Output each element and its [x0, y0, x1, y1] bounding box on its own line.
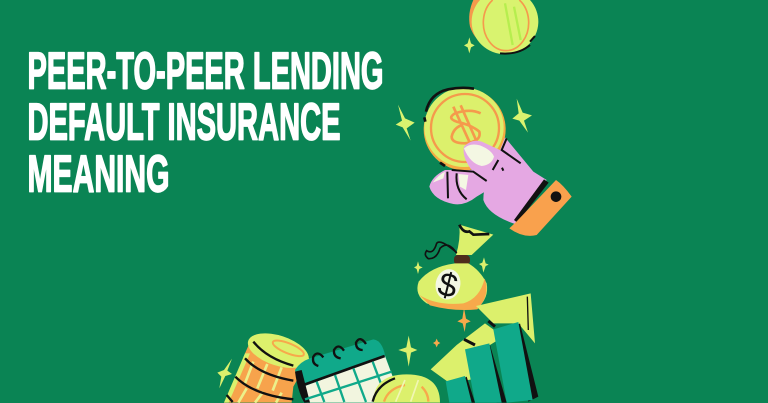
fingers: [429, 170, 493, 204]
sparkle: below bag: [457, 308, 471, 332]
icon: coin stack: [224, 327, 313, 403]
title: DEFAULT INSURANCE: [28, 94, 341, 152]
sparkle: left of bag: [414, 261, 423, 274]
icon: bottom coin: [373, 374, 440, 403]
icon: growth arrow and bar chart: [431, 293, 538, 403]
title: MEANING: [28, 146, 170, 204]
icon: money bag: $: [434, 266, 461, 306]
sparkle: small orange: [433, 339, 440, 347]
sparkle: left of coin: [396, 105, 415, 141]
icon: hand holding dollar coin: [396, 88, 572, 236]
sleeve cuff: [514, 179, 549, 223]
coin: [424, 88, 506, 170]
palm and thumb: [464, 137, 547, 224]
icon: calendar: [295, 339, 393, 403]
sparkle: right of coin: [512, 99, 532, 133]
sparkle: right of bag: [479, 257, 489, 273]
sparkle: mid: [398, 336, 417, 367]
icon: top falling coin: [464, 0, 538, 54]
sparkle: left of coins: [217, 359, 232, 388]
title: [28, 42, 384, 204]
title: PEER-TO-PEER LENDING: [28, 42, 384, 100]
icon: money bag: [217, 225, 493, 388]
